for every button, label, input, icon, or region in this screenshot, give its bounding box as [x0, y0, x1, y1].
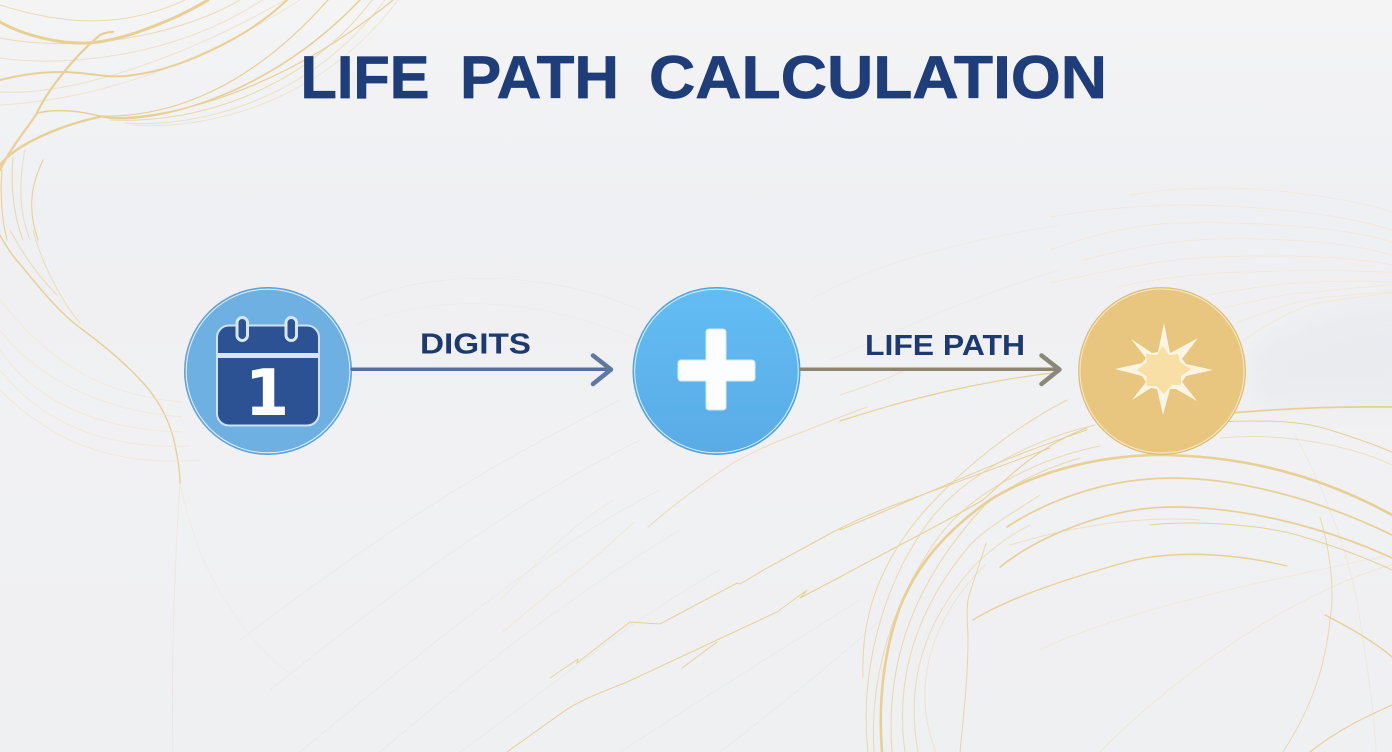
background swirl lines: right and bottom right — [500, 370, 1392, 752]
arrow: digits — [352, 356, 611, 384]
background faint contour lines — [0, 188, 1392, 461]
label: life path: LIFE PATH — [865, 330, 1025, 362]
label: digits: DIGITS — [420, 328, 531, 360]
title: CALCULATION — [649, 44, 1107, 111]
title — [300, 44, 1107, 111]
title: LIFE — [300, 44, 430, 111]
title: PATH — [460, 44, 619, 111]
background faint diagonal lines — [240, 225, 1060, 752]
icon: plus in blue circle — [633, 288, 800, 454]
background swirl lines: top left — [0, 0, 398, 752]
icon: calendar in blue circle — [184, 288, 352, 454]
icon: calendar in blue circle: 1 — [245, 357, 289, 431]
icon: star in gold circle — [1078, 288, 1246, 454]
arrow: life path — [801, 356, 1060, 384]
